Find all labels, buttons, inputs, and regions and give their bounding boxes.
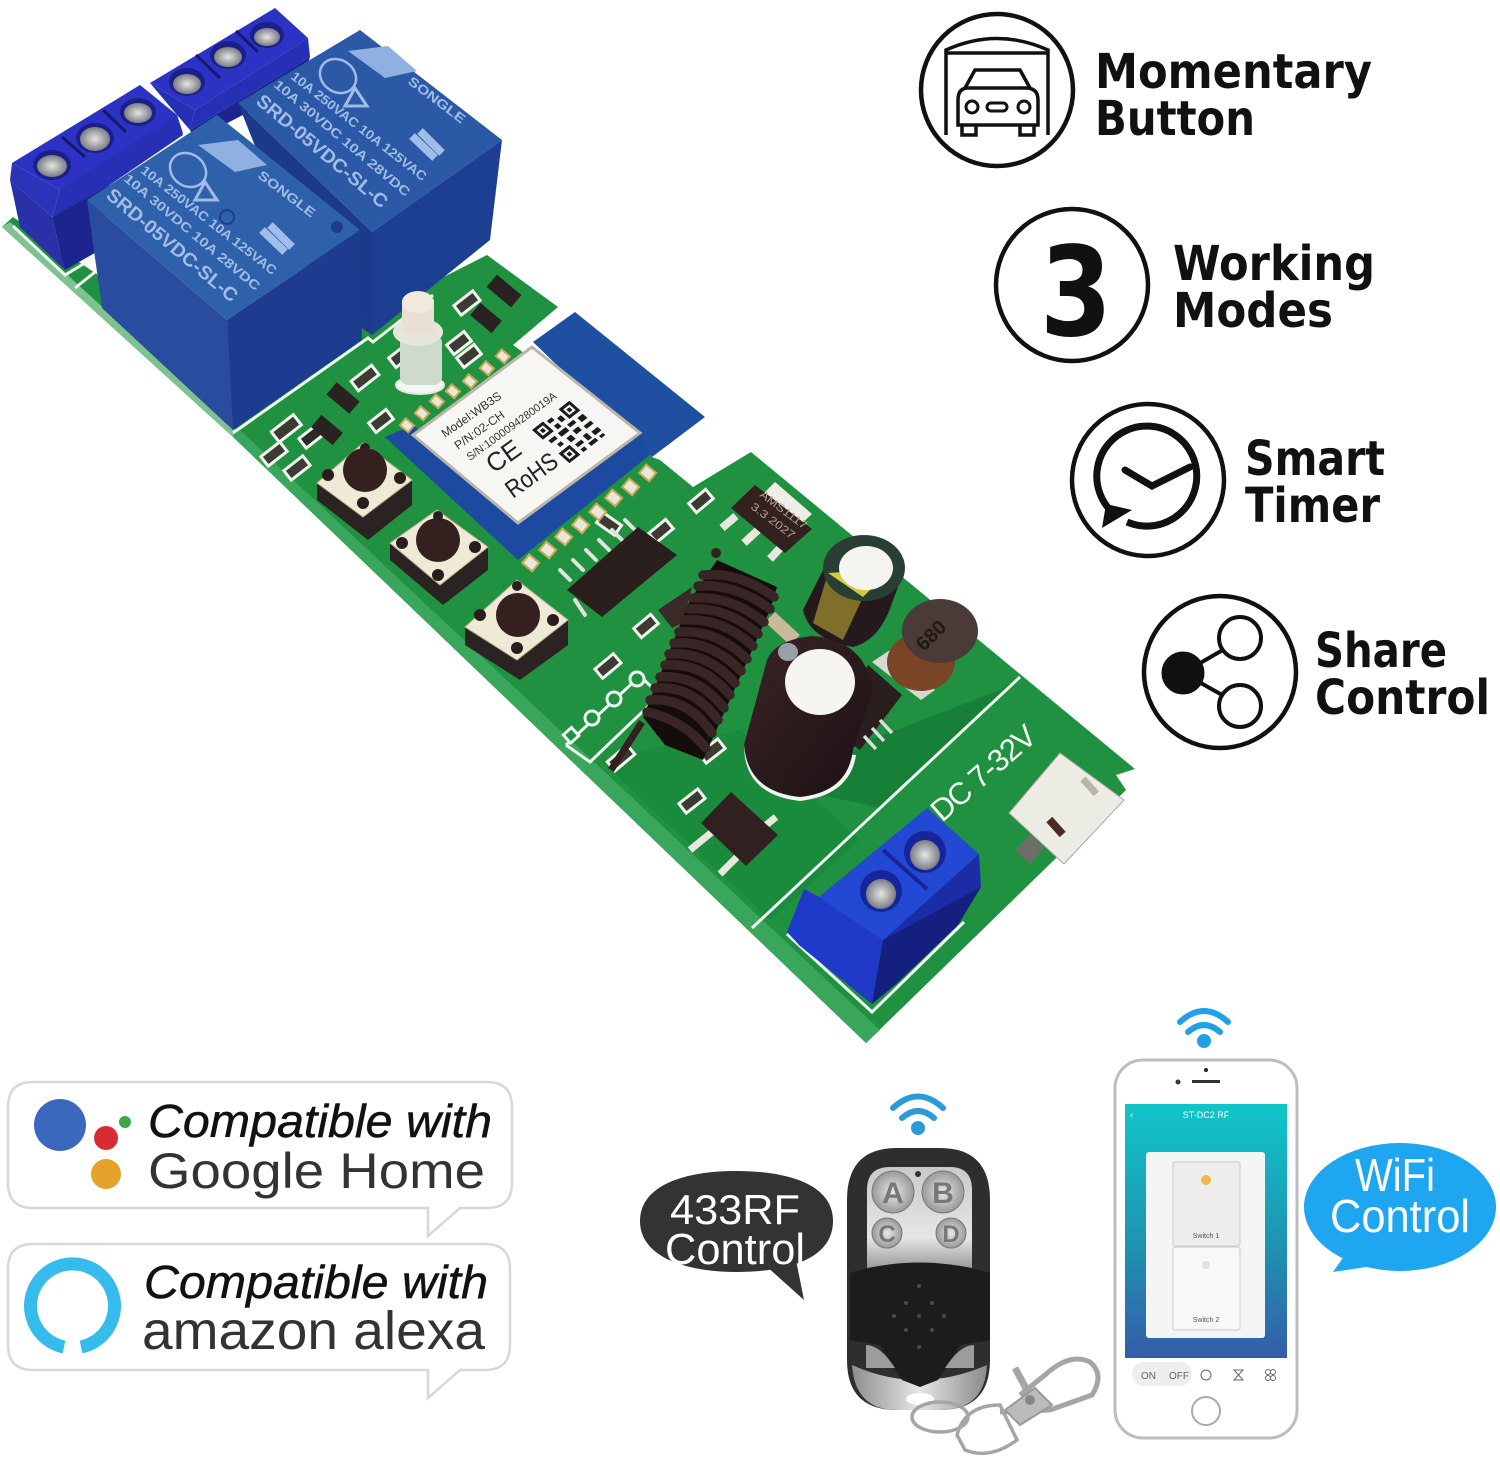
badge: Google Home	[8, 1082, 512, 1236]
icon: Alexa ring	[30, 1264, 114, 1347]
button 2	[390, 510, 488, 605]
badge: Amazon Alexa	[8, 1244, 510, 1398]
remote buttons: A	[882, 1177, 904, 1210]
panel: relay circuit board photo	[2, 8, 1135, 1043]
wifi module: CE	[480, 433, 527, 479]
feature: Smart Timer: Smart	[1245, 431, 1385, 487]
voltage label: DC 7-32V	[924, 718, 1043, 828]
icon: number 3: 3	[1040, 221, 1112, 365]
smartphone	[1115, 1060, 1297, 1438]
app screen: OFF	[1169, 1371, 1189, 1382]
app screen: ST-DC2 RF	[1183, 1110, 1230, 1120]
app screen	[1125, 1104, 1287, 1386]
remote buttons: D	[942, 1221, 960, 1248]
regulator AMS1117: 3.3 2027	[748, 501, 797, 542]
SMD resistors and transistors	[261, 275, 725, 813]
feature: Momentary Button: Button	[1095, 91, 1255, 147]
icon: number 3	[996, 209, 1148, 365]
switch 2: Switch 2	[1193, 1317, 1219, 1324]
keychain	[912, 1359, 1098, 1453]
dark component behind coil	[658, 587, 692, 628]
icon: wifi above remote	[893, 1096, 943, 1132]
icon: clock	[1072, 404, 1224, 556]
callout: WiFi Control: WiFi	[1355, 1149, 1435, 1201]
feature: Smart Timer: Timer	[1245, 478, 1380, 534]
terminal block: right	[150, 8, 310, 140]
wifi module: RoHS	[500, 447, 563, 504]
transistor	[690, 792, 778, 874]
remote buttons: B	[932, 1177, 954, 1210]
icon: wifi above phone	[1180, 1011, 1228, 1045]
badge: Google Home: Google Home	[148, 1143, 485, 1199]
wifi module: Model:WB3S	[439, 389, 504, 440]
relay: back: 10A 250VAC 10A 125VAC	[288, 69, 430, 184]
remote buttons	[872, 1171, 966, 1248]
switch 1	[1173, 1162, 1240, 1246]
IC chip	[560, 520, 677, 617]
tan resistor	[765, 612, 800, 645]
small capacitor	[803, 535, 905, 647]
relay: front	[87, 115, 362, 430]
relay: back: SONGLE	[405, 73, 469, 127]
micro USB	[1009, 753, 1124, 864]
switch 1: Switch 1	[1193, 1233, 1219, 1240]
app screen: ‹	[1130, 1110, 1133, 1121]
terminal block: left	[10, 85, 183, 270]
app screen: ON	[1141, 1371, 1156, 1382]
tactile buttons	[317, 443, 568, 680]
button 3	[465, 580, 568, 680]
callout: WiFi Control	[1304, 1143, 1496, 1272]
inductor: 680	[912, 616, 951, 656]
badge: Amazon Alexa: Compatible with	[144, 1256, 488, 1308]
relay: front: 10A 30VDC 10A 28VDC	[121, 171, 264, 294]
wifi module: P/N:02-CH	[452, 408, 507, 452]
large capacitor	[744, 636, 873, 801]
SOP chip under capacitor	[830, 665, 902, 750]
callout: 433RF Control	[640, 1171, 833, 1300]
relay: back: 10A 30VDC 10A 28VDC	[271, 77, 414, 200]
button 1	[317, 443, 412, 540]
module pads	[400, 349, 656, 571]
relay: back: SRD-05VDC-SL-C	[252, 91, 392, 213]
feature: Share Control	[1144, 596, 1490, 748]
relay: front: SRD-05VDC-SL-C	[102, 185, 242, 307]
icon: share nodes	[1144, 596, 1296, 748]
QR code	[532, 401, 607, 463]
feature: 3 Working Modes: Working	[1173, 236, 1375, 292]
icon: garage car	[921, 14, 1073, 166]
feature: 3 Working Modes: Modes	[1173, 283, 1333, 339]
remote control	[847, 1148, 990, 1410]
regulator AMS1117	[722, 482, 812, 559]
power terminal	[787, 808, 981, 1004]
wifi module	[385, 312, 705, 571]
feature: Momentary Button	[921, 14, 1372, 166]
badge: Amazon Alexa: amazon alexa	[142, 1301, 486, 1361]
LED	[393, 291, 444, 394]
regulator AMS1117: AMS1117	[757, 489, 809, 532]
callout: 433RF Control: Control	[665, 1225, 805, 1274]
badge: Google Home: Compatible with	[148, 1095, 492, 1147]
switch 2	[1173, 1247, 1240, 1330]
remote buttons: C	[878, 1221, 896, 1248]
PCB	[2, 217, 1135, 1043]
header pads	[563, 672, 644, 743]
feature: Momentary Button: Momentary	[1095, 44, 1372, 100]
wifi module: S/N:1000094280019A	[465, 390, 560, 463]
feature: 3 Working Modes	[996, 209, 1375, 365]
relay: back	[238, 30, 502, 335]
relay: front: SONGLE	[255, 167, 319, 221]
relay: front: 10A 250VAC 10A 125VAC	[138, 163, 280, 278]
callout: WiFi Control: Control	[1330, 1190, 1470, 1242]
feature: Share Control: Share	[1315, 623, 1447, 679]
white silk lines	[13, 226, 1020, 1012]
inductor	[872, 599, 978, 700]
callout: 433RF Control: 433RF	[670, 1186, 800, 1233]
feature: Smart Timer	[1072, 404, 1385, 556]
coil antenna	[611, 548, 777, 770]
icon: Google Assistant dots	[34, 1099, 131, 1189]
